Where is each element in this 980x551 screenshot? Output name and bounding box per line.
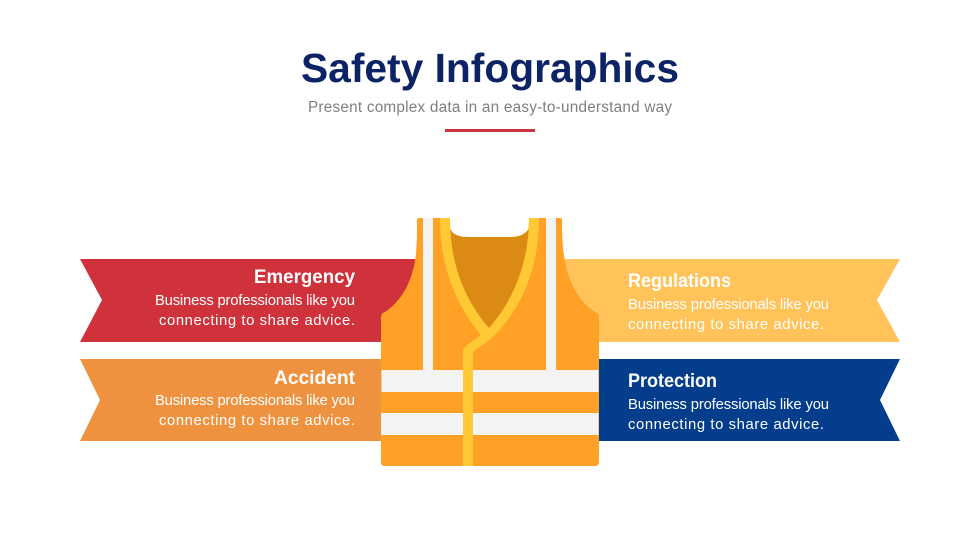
text: regulations description	[628, 297, 829, 333]
heading: protection: Protection	[628, 371, 717, 392]
text: regulations description: connecting to share advice.	[628, 317, 824, 333]
panel: accident	[80, 359, 420, 441]
heading: accident: Accident	[274, 368, 356, 389]
text: accident description	[155, 393, 355, 429]
text: accident description: connecting to share advice.	[159, 413, 355, 429]
text: protection description: Business professionals like you	[628, 397, 829, 413]
icon: safety vest	[381, 218, 599, 466]
text: protection description: connecting to share advice.	[628, 417, 824, 433]
panel: emergency	[80, 259, 420, 342]
text: accident description: Business professionals like you	[155, 393, 355, 409]
heading: regulations: Regulations	[628, 271, 731, 292]
panel: regulations	[560, 259, 900, 342]
subtitle: Present complex data in an easy-to-understand way	[308, 99, 672, 116]
panel: protection	[560, 359, 900, 441]
text: protection description	[628, 397, 829, 433]
text: regulations description: Business professionals like you	[628, 297, 829, 313]
title: Safety Infographics	[301, 45, 679, 91]
text: emergency description	[155, 293, 355, 329]
text: emergency description: Business professionals like you	[155, 293, 355, 309]
heading: emergency: Emergency	[254, 267, 355, 288]
text: emergency description: connecting to share advice.	[159, 313, 355, 329]
red title underline	[445, 129, 535, 132]
